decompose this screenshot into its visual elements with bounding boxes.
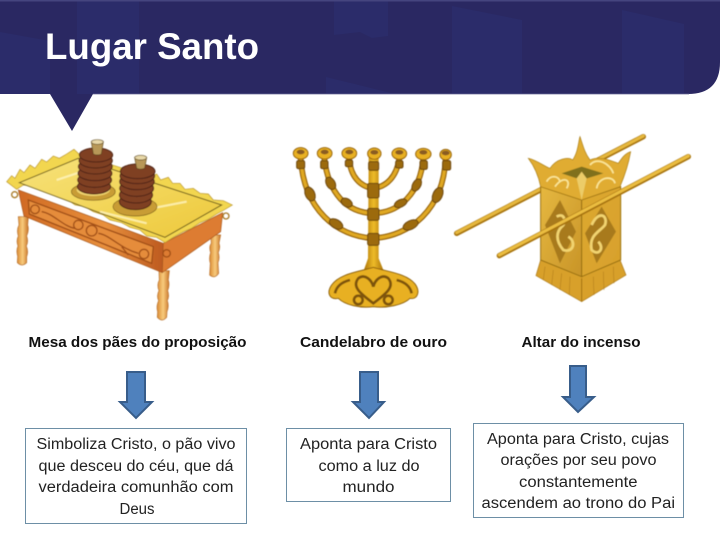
altar base bbox=[536, 260, 626, 302]
box 2: lampstand meaning bbox=[286, 428, 450, 502]
arrow 2 bbox=[353, 372, 384, 418]
table rings bbox=[12, 192, 229, 219]
central stem bbox=[363, 157, 384, 272]
box 3: altar meaning: Aponta para Cristo, cujas bbox=[487, 431, 669, 448]
box 1: bread meaning: verdadeira comunhão com bbox=[38, 479, 234, 496]
front pole bbox=[499, 157, 688, 256]
lamp cups bbox=[293, 148, 451, 160]
box 2: lampstand meaning: Aponta para Cristo bbox=[300, 436, 437, 453]
knops bbox=[297, 160, 451, 245]
column 3 heading: Altar do incenso bbox=[522, 334, 640, 351]
column 1 heading: Mesa dos pães do proposição bbox=[28, 334, 246, 351]
illustration: golden lampstand bbox=[293, 148, 451, 307]
box 3: altar meaning: ascendem ao trono do Pai bbox=[482, 495, 675, 512]
header banner bbox=[0, 0, 720, 131]
altar faces bbox=[541, 187, 582, 277]
title: Lugar Santo bbox=[45, 26, 259, 67]
ornate base bbox=[329, 267, 418, 307]
table top with scalloped crown bbox=[7, 149, 232, 243]
back pole bbox=[457, 137, 643, 233]
box 3: altar meaning bbox=[474, 424, 684, 518]
illustration: table of showbread bbox=[7, 140, 232, 320]
bread stack 2 bbox=[113, 155, 157, 216]
carved panel bbox=[28, 200, 170, 263]
box 1: bread meaning: que desceu do céu, que dá bbox=[38, 458, 234, 475]
table legs bbox=[17, 217, 221, 320]
box 1: bread meaning: Deus bbox=[120, 501, 155, 518]
box 1: bread meaning: Simboliza Cristo, o pão vivo bbox=[36, 436, 236, 453]
illustration: altar of incense bbox=[457, 136, 688, 302]
arrow 3 bbox=[563, 366, 594, 412]
box 3: altar meaning: orações por seu povo bbox=[500, 452, 656, 469]
diamond ornaments bbox=[545, 200, 576, 263]
bread stack 1 bbox=[71, 140, 115, 200]
box 2: lampstand meaning: como a luz do bbox=[318, 458, 420, 475]
table apron bbox=[18, 190, 163, 273]
box 3: altar meaning: constantemente bbox=[519, 474, 638, 491]
box 1: bread meaning bbox=[26, 428, 246, 524]
branches bbox=[301, 158, 446, 238]
altar crown bbox=[528, 137, 631, 200]
arrow 1 bbox=[120, 372, 152, 418]
box 2: lampstand meaning: mundo bbox=[342, 479, 394, 496]
column 2 heading: Candelabro de ouro bbox=[300, 334, 447, 351]
